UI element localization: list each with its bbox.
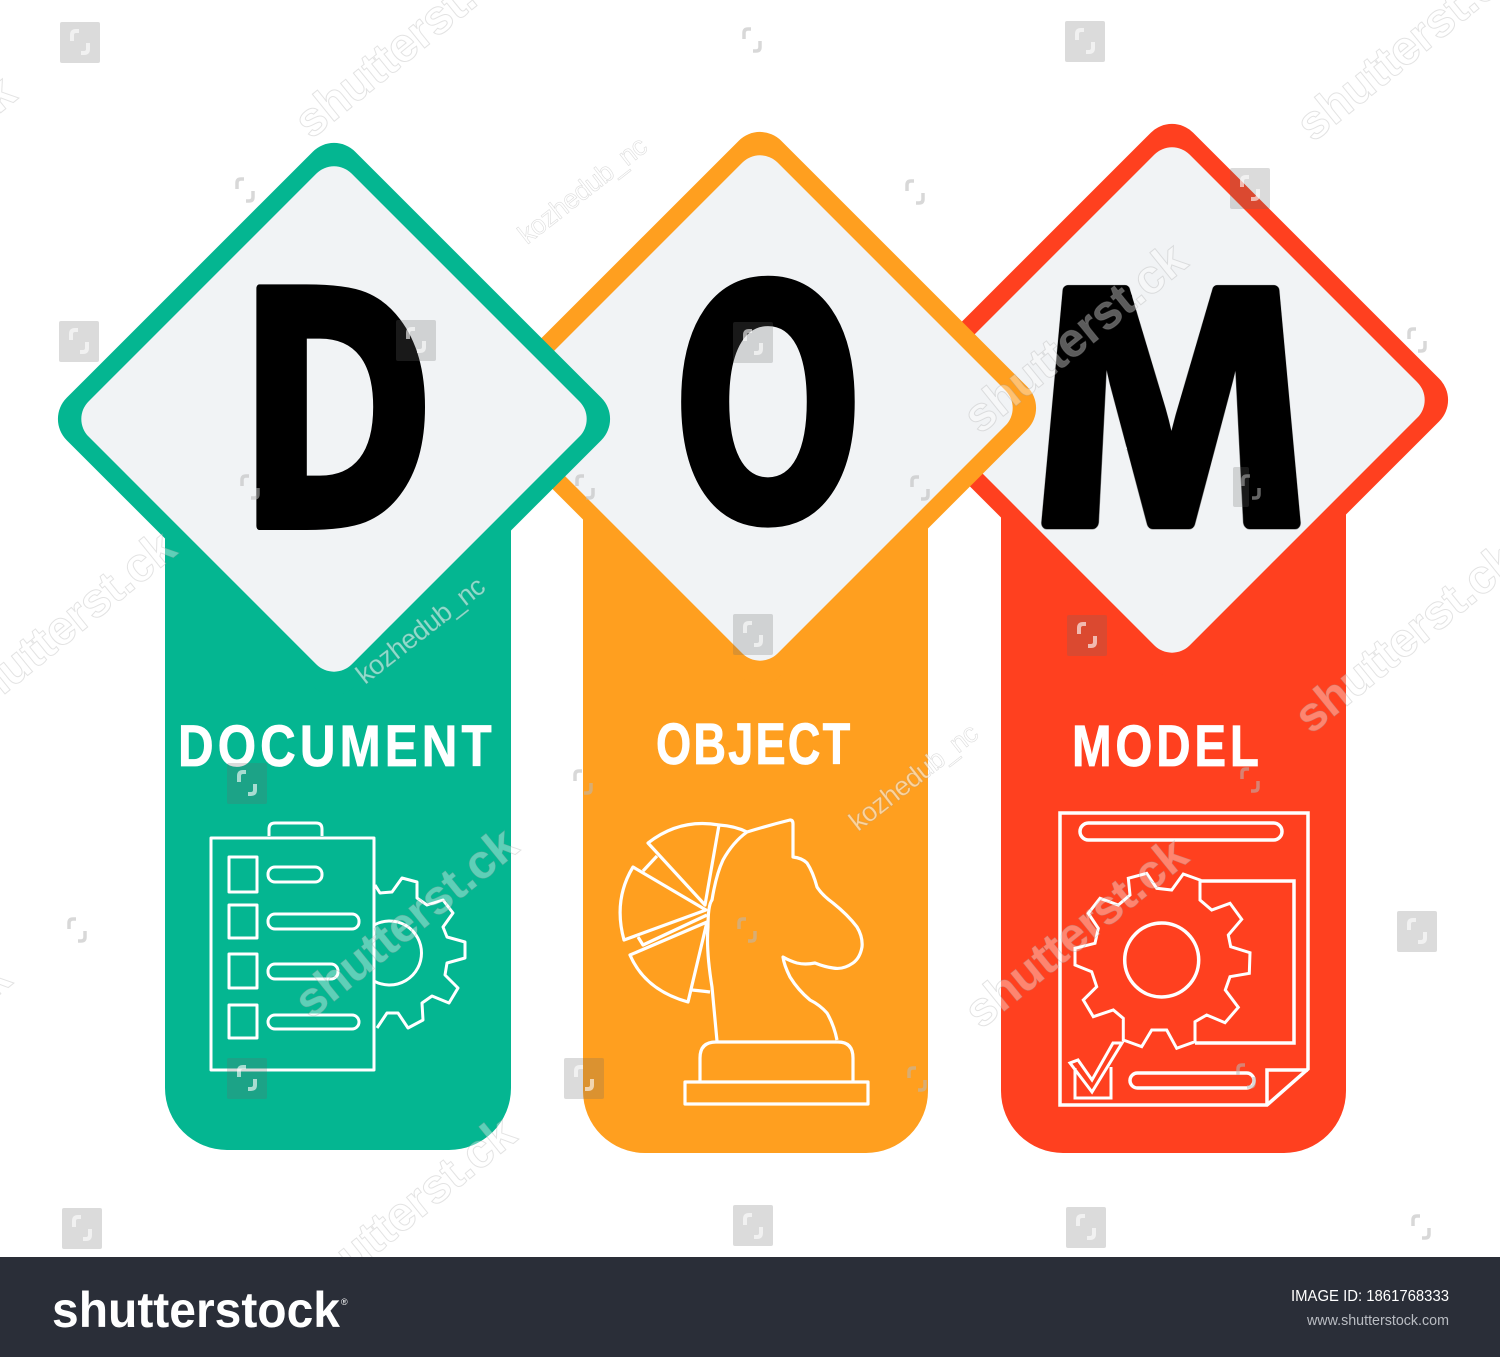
heading: document: DOCUMENT	[178, 714, 492, 779]
watermark: contributor name: kozhedub_nc	[512, 131, 653, 250]
panel: object orange column	[583, 495, 928, 1153]
diamond: D green	[46, 131, 622, 707]
watermark: contributor name	[350, 131, 984, 837]
diamond: O orange	[472, 120, 1048, 696]
icon: chess knight with pie chart	[620, 820, 868, 1104]
watermark: shutterstock diagonal marks: shutterst.ck	[955, 827, 1198, 1039]
watermark: contributor name: kozhedub_nc	[350, 571, 491, 690]
watermark: shutterstock diagonal marks: shutterst.ck	[283, 1106, 526, 1318]
icon: clipboard checklist with gear	[211, 823, 465, 1070]
footer registered mark: ®	[341, 1297, 348, 1307]
panel: document green column	[165, 500, 511, 1150]
watermark: contributor name: kozhedub_nc	[843, 718, 984, 837]
footer bar	[0, 1257, 1500, 1357]
panel: model red column	[1001, 495, 1346, 1153]
icon: document with gear and checkmark	[1060, 813, 1308, 1105]
diamond: M red	[884, 112, 1460, 688]
heading: object: OBJECT	[656, 713, 850, 777]
watermark: shutterstock diagonal marks: shutterst.ck	[954, 232, 1197, 444]
watermark: shutterstock diagonal marks: shutterst.ck	[285, 817, 528, 1029]
letter D: D	[238, 223, 434, 603]
heading: model: MODEL	[1072, 715, 1259, 779]
footer site url: www.shutterstock.com	[1306, 1312, 1449, 1329]
letter M: M	[867, 266, 1476, 525]
footer logo text: shutterstock	[52, 1282, 340, 1338]
letter O: O	[672, 218, 864, 597]
footer image id: IMAGE ID: 1861768333	[1291, 1288, 1449, 1305]
